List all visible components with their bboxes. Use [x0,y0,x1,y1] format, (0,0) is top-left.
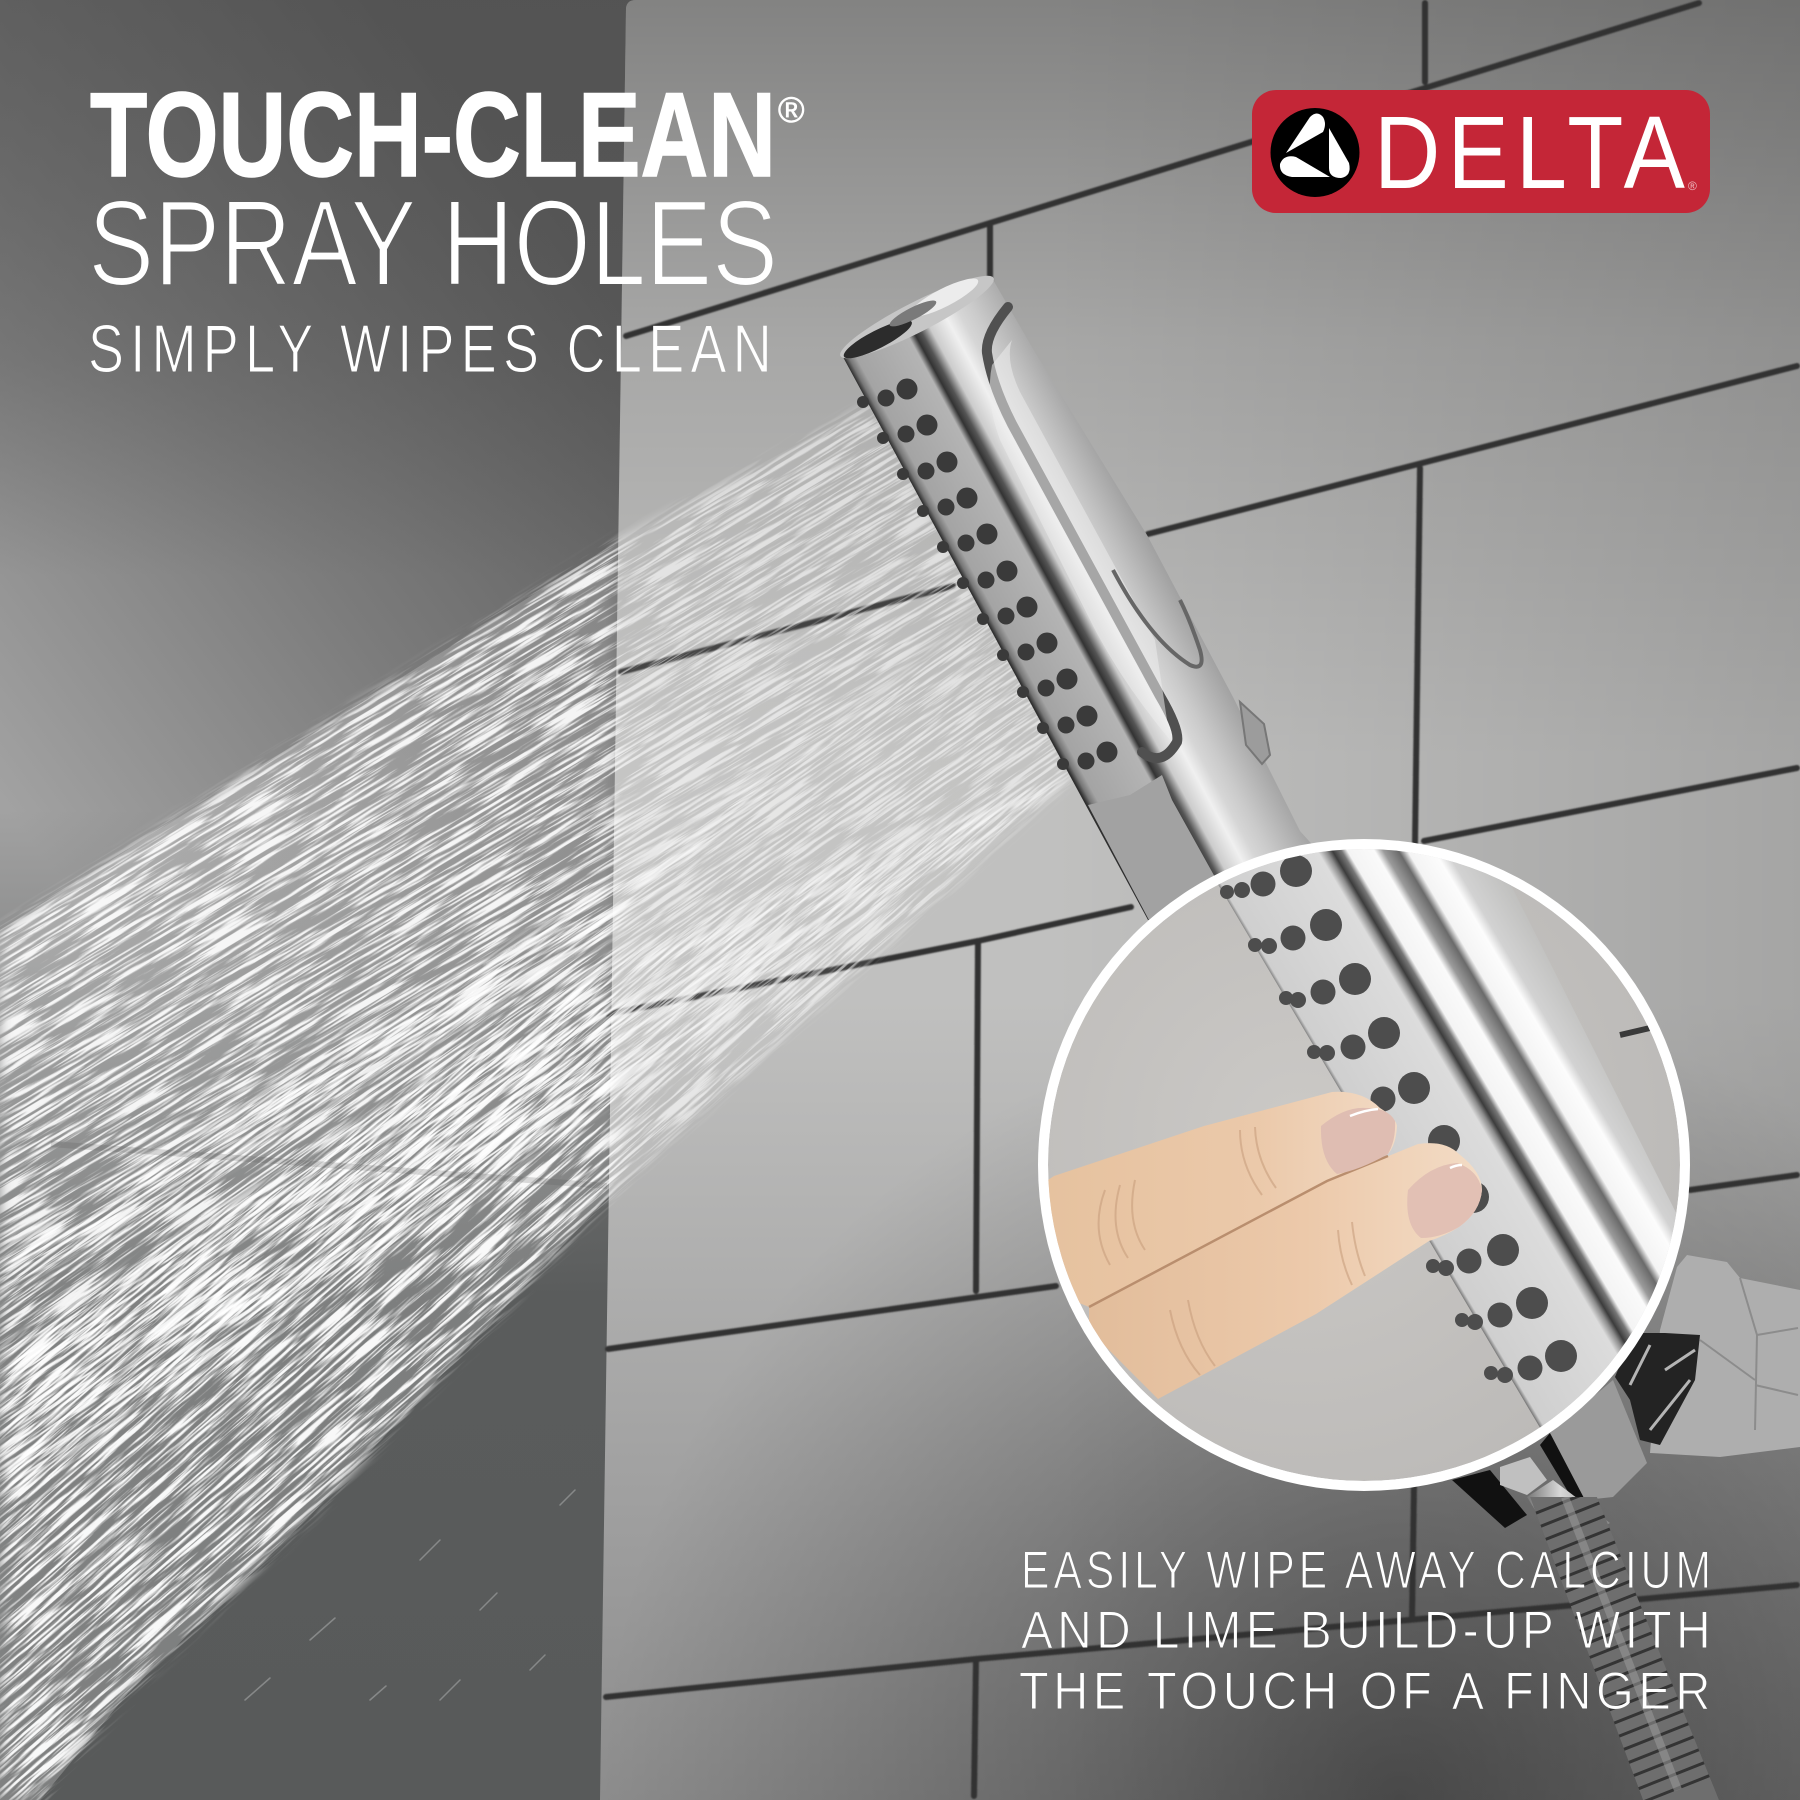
inset tile line [1620,1028,1650,1035]
inner panel highlight [990,340,1170,740]
inset background wall [1048,849,1680,1481]
background: tiled shower wall [600,0,1800,1800]
brand wordmark: DELTA [1374,95,1692,210]
logo emblem [1270,108,1360,197]
shoulder of handle [1088,775,1240,922]
subheading: SIMPLY WIPES CLEAN [88,311,778,387]
hand shower neck and clip [1452,1380,1647,1550]
fingernail upper [1321,1108,1395,1174]
finger crease [1089,1156,1388,1307]
shower head [834,265,1380,922]
tile grout lines [606,3,1797,1796]
heading: Spray Holes: SPRAY HOLES [88,175,778,311]
fingernail lower [1407,1163,1482,1238]
caption text [1019,1541,1715,1721]
title block [88,68,805,387]
nail highlights [1350,1109,1462,1168]
registered mark: ® [1688,179,1697,193]
registered mark: ® [778,89,805,130]
inset circle: finger wiping spray holes [1038,800,1720,1491]
water spray jets [0,400,1100,1800]
flexible hose [1530,1497,1719,1800]
caption text: AND LIME BUILD-UP WITH [1021,1601,1715,1660]
wall mount holder [1615,1255,1800,1457]
lower finger [1089,1143,1482,1399]
side button [1240,702,1270,764]
heading: Touch-Clean: TOUCH-CLEAN [90,68,776,202]
head body [843,278,1380,920]
caption text: THE TOUCH OF A FINGER [1019,1662,1715,1721]
inset shower head close-up [1218,849,1676,1428]
spray nozzles [857,378,1118,770]
recessed side groove [987,307,1177,758]
knuckle wrinkles [1099,1127,1365,1375]
top cap [834,265,1000,369]
Delta logo badge [1252,90,1710,213]
inset large spray holes [1220,855,1577,1383]
background: dark left wall [0,0,640,1800]
teardrop detail on handle [1113,570,1202,667]
upper finger [1048,1092,1397,1307]
